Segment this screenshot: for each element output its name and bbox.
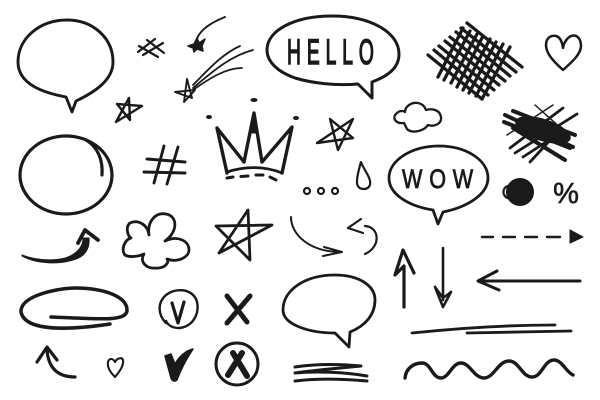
icon: check in circle	[160, 290, 198, 328]
wavy line	[405, 360, 573, 378]
icon: small cloud	[394, 103, 441, 132]
hatch scribble	[428, 23, 522, 99]
underline strokes	[412, 325, 571, 333]
icon: small star	[116, 98, 142, 122]
arrow: dashed right	[482, 230, 583, 243]
icon: star top right	[317, 119, 353, 150]
label: HELLO: HELLO	[287, 32, 374, 71]
icon: small heart	[108, 358, 123, 377]
arrow: thin curved	[291, 217, 342, 256]
icon: cross	[227, 296, 250, 323]
arrow: long left	[478, 271, 580, 290]
icon: crown	[206, 98, 298, 180]
icon: ink blob	[504, 178, 534, 206]
icon: bold check	[165, 349, 193, 381]
icon: percent sign: %	[553, 178, 579, 210]
label: WOW: WOW	[402, 165, 473, 195]
speech bubble: HELLO	[267, 16, 399, 98]
icon: large hash	[144, 146, 185, 184]
arrow: return	[348, 219, 377, 254]
icon: heart outline	[546, 35, 581, 70]
oval marker	[21, 288, 127, 328]
speech bubble: bottom centre	[283, 275, 375, 347]
arrow: curved left	[22, 230, 98, 263]
arrow: small up left	[37, 347, 75, 377]
icon: shooting star	[175, 46, 253, 102]
circle marker	[20, 136, 112, 214]
icon: large star	[216, 210, 272, 260]
arrow: down	[435, 248, 451, 307]
icon: cross in circle	[216, 343, 258, 385]
icon: arrow with star	[188, 17, 225, 52]
cross scribble	[504, 105, 577, 162]
icon: three small dots	[304, 188, 338, 194]
speech bubble: empty top left	[18, 20, 113, 112]
speech bubble: WOW	[389, 146, 488, 224]
arrow: up	[395, 250, 414, 307]
scribble lines	[295, 365, 367, 381]
icon: large cloud	[123, 214, 189, 268]
icon: small hash	[138, 39, 164, 57]
icon: drop	[357, 162, 370, 189]
